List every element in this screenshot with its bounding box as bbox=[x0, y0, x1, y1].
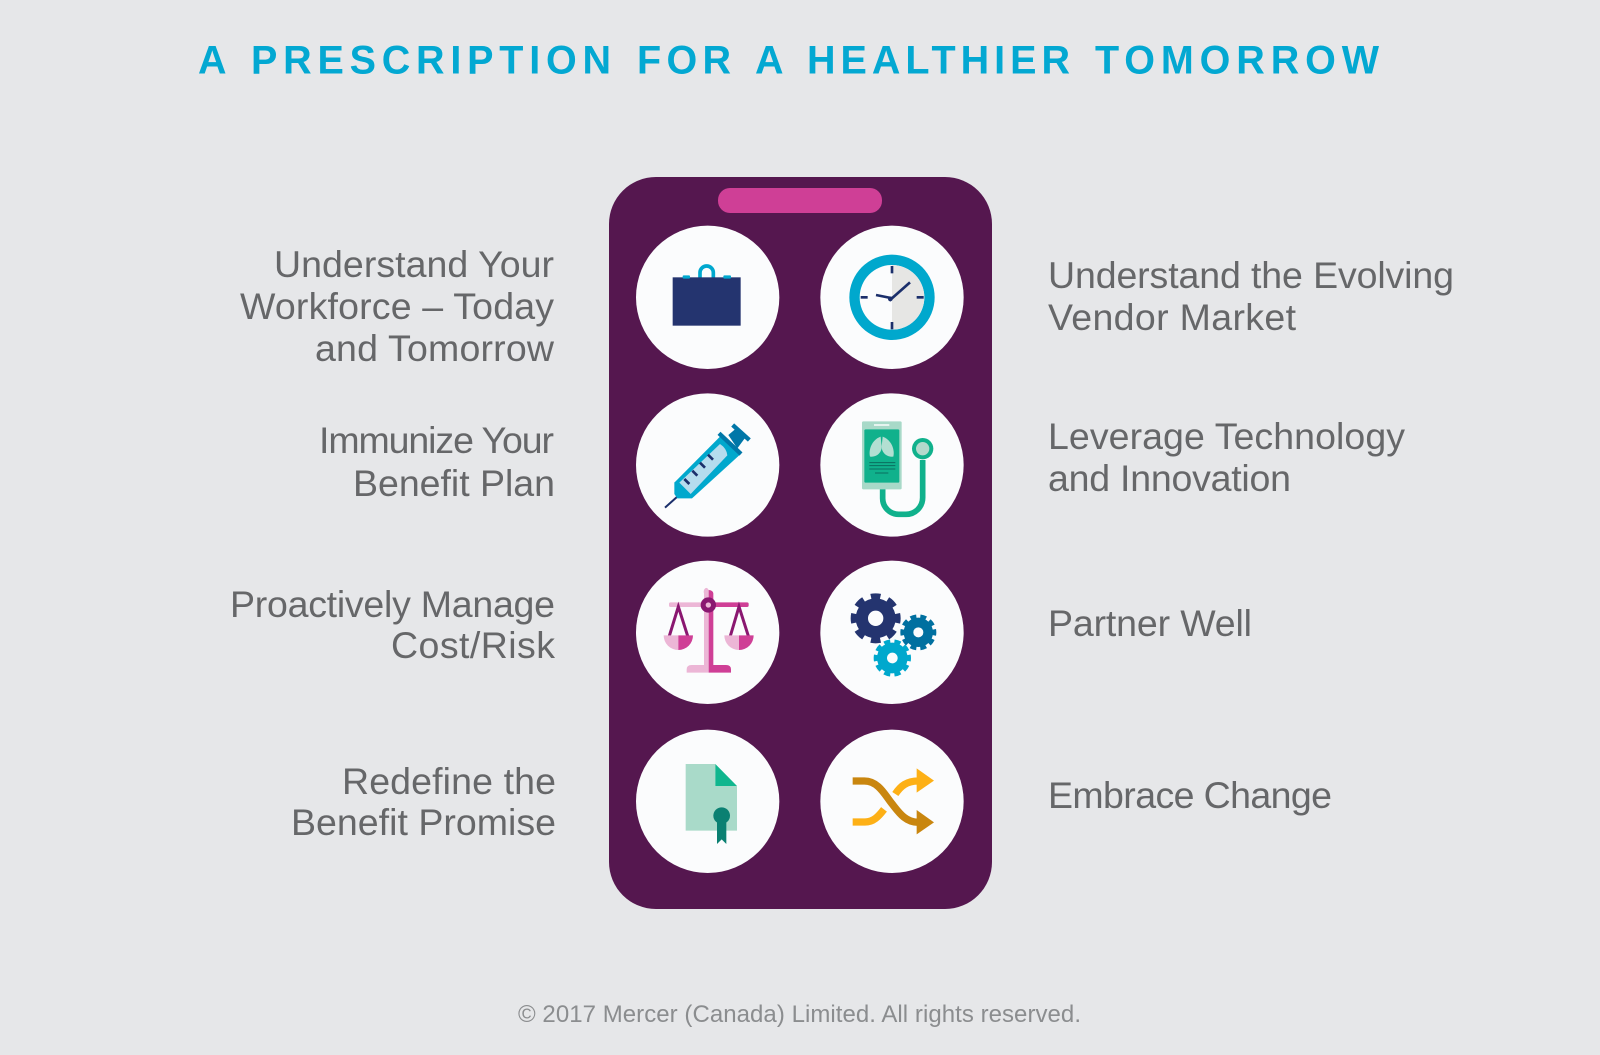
label: Redefine the Benefit Promise: Benefit Promise bbox=[291, 801, 556, 843]
label: Understand the Evolving Vendor Market bbox=[1048, 254, 1454, 338]
label: Understand the Evolving Vendor Market: Understand the Evolving bbox=[1048, 254, 1454, 296]
label: Immunize Your Benefit Plan: Benefit Plan bbox=[353, 462, 555, 504]
label: Understand Your Workforce: Workforce – Today bbox=[240, 285, 554, 327]
label: Proactively Manage Cost/Risk bbox=[230, 583, 555, 666]
icon: gears bbox=[820, 561, 964, 704]
title: TOMORROW bbox=[1095, 38, 1380, 82]
label: Immunize Your Benefit Plan bbox=[319, 419, 555, 504]
label: Understand Your Workforce bbox=[240, 243, 555, 369]
label: Understand Your Workforce: Understand Your bbox=[274, 243, 554, 285]
icon: clock bbox=[820, 226, 964, 369]
icon: briefcase bbox=[636, 226, 779, 369]
icon: phone with stethoscope bbox=[820, 393, 964, 537]
pill organiser panel bbox=[609, 177, 992, 909]
title: A bbox=[755, 38, 784, 82]
title: A bbox=[198, 38, 227, 82]
label: Proactively Manage Cost/Risk: Proactively Manage bbox=[230, 583, 555, 625]
left labels bbox=[230, 243, 556, 843]
label: Leverage Technology and Innovation: and Innovation bbox=[1048, 457, 1291, 499]
panel body bbox=[609, 177, 992, 909]
label: Embrace Change: Embrace Change bbox=[1048, 774, 1332, 816]
icon: syringe bbox=[636, 393, 779, 537]
right labels bbox=[1048, 254, 1454, 816]
title: PRESCRIPTION bbox=[251, 38, 611, 82]
title bbox=[198, 38, 1380, 82]
icon: certificate document bbox=[636, 730, 779, 873]
label: Leverage Technology and Innovation bbox=[1048, 415, 1405, 499]
label: Understand the Evolving Vendor Market: Vendor Market bbox=[1048, 296, 1297, 338]
copyright footer: © 2017 Mercer (Canada) Limited. All rights reserved. bbox=[518, 1001, 1081, 1028]
label: Partner Well: Partner Well bbox=[1048, 602, 1252, 644]
label: Immunize Your Benefit Plan: Immunize Your bbox=[319, 419, 554, 461]
icon: crossing arrows bbox=[820, 730, 964, 873]
label: Redefine the Benefit Promise: Redefine the bbox=[342, 760, 556, 802]
icon: balance scales bbox=[636, 561, 779, 704]
title: FOR bbox=[637, 38, 731, 82]
title: HEALTHIER bbox=[807, 38, 1070, 82]
pink lid tab bbox=[718, 188, 882, 213]
label: Understand Your Workforce: and Tomorrow bbox=[315, 327, 555, 369]
label: Redefine the Benefit Promise bbox=[291, 760, 556, 843]
label: Leverage Technology and Innovation: Leverage Technology bbox=[1048, 415, 1405, 457]
label: Proactively Manage Cost/Risk: Cost/Risk bbox=[391, 624, 555, 666]
